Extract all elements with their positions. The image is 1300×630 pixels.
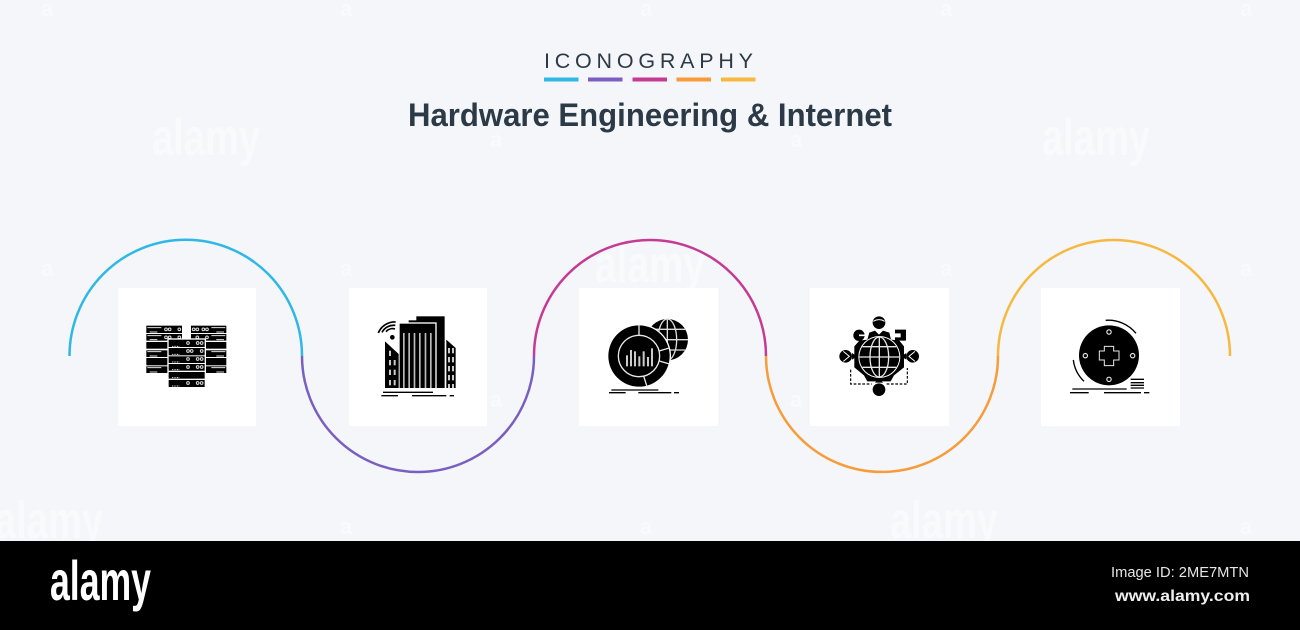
icon: pie chart with globe: [607, 319, 688, 393]
watermarks: a: [790, 387, 803, 412]
panel: smart building: [349, 288, 487, 426]
panel: medical disc: [1041, 288, 1180, 426]
eyebrow: ICONOGRAPHY: ICONOGRAPHY: [544, 49, 753, 73]
panel: server racks: [118, 288, 256, 426]
watermarks: a: [1240, 256, 1253, 281]
footer band: [0, 541, 1300, 630]
icon: medical cross disc: [1070, 320, 1149, 393]
watermarks: a: [490, 127, 503, 152]
watermarks: a: [340, 256, 353, 281]
watermarks: alamy: [595, 236, 705, 294]
connecting wave of arcs: [70, 240, 1230, 472]
watermarks: a: [41, 256, 54, 281]
icon: smart building with wifi: [378, 316, 456, 396]
icon: team around globe: [839, 316, 919, 396]
panel: global data chart: [579, 288, 718, 426]
watermarks: a: [640, 514, 653, 539]
watermarks: alamy: [152, 109, 260, 167]
panel: global team: [810, 288, 949, 426]
watermarks: a: [790, 127, 803, 152]
watermarks: a: [1240, 514, 1253, 539]
watermarks: a: [940, 256, 953, 281]
watermarks: a: [340, 514, 353, 539]
image id: Image ID: 2ME7MTN: [1111, 564, 1249, 581]
watermarks: alamy: [1042, 109, 1150, 167]
watermarks: alamy: [890, 492, 998, 550]
footer logo: alamy: [50, 549, 151, 612]
title: Hardware Engineering & Internet: [408, 97, 892, 133]
watermarks: a: [490, 387, 503, 412]
website: www.alamy.com: [1114, 588, 1250, 605]
colour bars: [544, 78, 756, 82]
icon: server racks: [146, 326, 226, 388]
